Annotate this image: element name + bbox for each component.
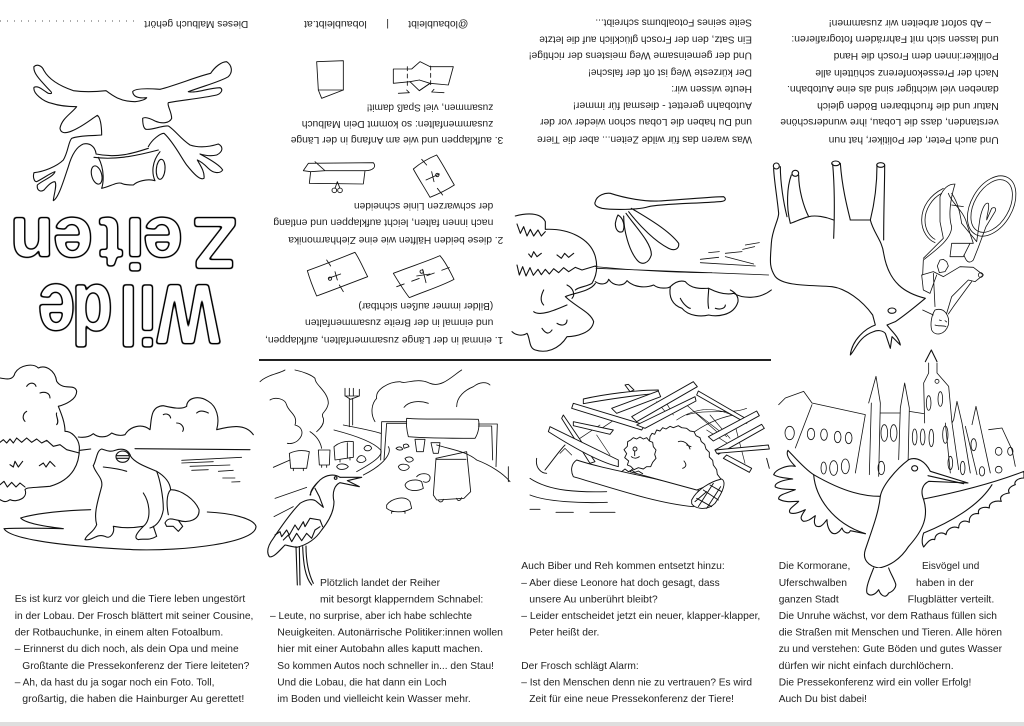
text block: town protest: haben in der: [916, 578, 974, 589]
panel: folding instructions (upside down): [265, 18, 503, 345]
text block: folding steps: zusammenfalten: so kommt Dein Malbuch: [301, 118, 493, 129]
text block: beaver, deer and frog dialogue: – Leider entscheidet jetzt ein neuer, klapper-klapper,: [521, 611, 760, 622]
text block: heron's warning: So kommen Autos noch schneller in... den Stau!: [277, 661, 494, 672]
text block: heron's warning: hier mit einer Autobahn alles kaputt machen.: [277, 644, 483, 655]
text block: heron's warning: Plötzlich landet der Reiher: [320, 578, 441, 589]
text block: closing moral: Autobahn gerettet - diesmal für immer!: [573, 99, 752, 110]
panel: dragonfly closing page (upside down): [512, 16, 771, 351]
footer: social handles: lobaubleibt.at: [304, 18, 367, 29]
text block: press conference result: verstanden, dass die Lobau, ihre wunderschöne: [780, 116, 999, 127]
illustration: deer: [770, 161, 937, 362]
text block: beaver, deer and frog dialogue: Peter heißt der.: [529, 628, 599, 638]
text block: opening dialogue: großartig, die haben die Hainburger Au gerettet!: [22, 694, 244, 705]
text block: press conference result: und lassen sich mit Fahrrädern fotografieren:: [791, 33, 999, 44]
illustration: frog on lily pad: [0, 365, 256, 550]
panel: deer and cyclist politician (upside down): [770, 17, 1024, 362]
illustration: motorway traffic jam: [260, 370, 510, 513]
text block: opening dialogue: [15, 594, 253, 705]
footer: social handles: @lobaubleibt: [408, 18, 468, 29]
text block: press conference result: Und auch Peter, der Politiker, hat nun: [828, 134, 999, 145]
text block: town protest: [779, 561, 1003, 705]
text block: press conference result: – Ab sofort arbeiten wir zusammen!: [829, 17, 991, 28]
text block: folding steps: 3. aufklappen und wie am Anfang in der Länge: [290, 134, 503, 145]
text block: opening dialogue: – Ah, da hast du ja sogar noch ein Foto. Toll,: [15, 678, 214, 688]
text block: press conference result: Nach der Pressekonferenz schütteln alle: [815, 67, 999, 78]
text block: opening dialogue: in der Lobau. Der Frosch blättert mit seiner Cousine,: [15, 611, 253, 622]
illustration: frog on a log: [33, 62, 231, 201]
icons: folding diagrams: [303, 61, 454, 298]
text block: beaver, deer and frog dialogue: Zeit für eine neue Pressekonferenz der Tiere!: [529, 694, 734, 705]
text block: town protest: die Straßen mit Menschen und Tieren. Alle hören: [779, 628, 1002, 638]
text block: press conference result: Politiker:innen dem Frosch die Hand: [833, 50, 999, 61]
text block: opening dialogue: – Erinnerst du dich noch, als dein Opa und meine: [15, 644, 239, 655]
text block: press conference result: Natur und die fruchtbaren Böden gleich: [817, 100, 999, 111]
panel: cover with title and frog on log (upside down): [10, 62, 237, 360]
text block: closing moral: Ein Satz, den der Frosch glücklich auf die letzte: [539, 33, 752, 44]
text block: beaver, deer and frog dialogue: Auch Biber und Reh kommen entsetzt hinzu:: [521, 561, 725, 572]
text block: town protest: Die Pressekonferenz wird ein voller Erfolg!: [779, 678, 971, 688]
text block: folding steps: (Bilder immer außen sichtbar): [358, 300, 493, 311]
text block: opening dialogue: Es ist kurz vor gleich und die Tiere leben ungestört: [15, 594, 245, 605]
text block: town protest: Die Unruhe wächst, vor dem Rathaus füllen sich: [779, 611, 997, 622]
text block: town protest: zu und verstehen: Gute Böden und gutes Wasser: [779, 644, 1003, 655]
text block: town protest: Die Kormorane,: [779, 561, 850, 572]
text block: closing moral: Seite seines Fotoalbums schreibt...: [595, 16, 752, 27]
text block: heron's warning: Neuigkeiten. Autonärrische Politiker:innen wollen: [277, 628, 503, 638]
panel: heron warns about motorway: [260, 370, 510, 705]
panel: frog and fire-bellied toad in the Lobau: [0, 365, 256, 705]
illustration: politician on bicycle: [922, 167, 1024, 334]
illustration: kingfisher in flight: [774, 450, 1024, 596]
illustration: town hall: [779, 363, 1015, 476]
text block: closing moral: Heute wissen wir:: [671, 83, 752, 94]
text block: town protest: dürfen wir nicht einfach durchlöchern.: [779, 661, 954, 672]
text block: press conference result: [780, 17, 999, 145]
footer: social handles: |: [386, 18, 389, 29]
text block: folding steps: und einmal in der Breite zusammenfalten: [305, 316, 493, 327]
text block: folding steps: 2. diese beiden Hälften wie eine Ziehharmonika: [288, 234, 503, 245]
text block: heron's warning: [270, 578, 503, 705]
text block: heron's warning: Und die Lobau, die hat dann ein Loch: [277, 678, 447, 688]
text block: closing moral: [529, 16, 752, 144]
text block: heron's warning: mit besorgt klapperndem Schnabel:: [320, 594, 483, 606]
text block: town protest: Flugblätter verteilt.: [908, 594, 994, 606]
text block: folding steps: nach innen falten, leicht aufklappen und entlang: [273, 217, 493, 228]
text block: town protest: Uferschwalben: [779, 578, 847, 589]
text block: beaver, deer and frog dialogue: – Aber diese Leonore hat doch gesagt, dass: [521, 578, 720, 589]
title: Wilde Zeiten: Zeiten: [10, 202, 237, 282]
text block: folding steps: [265, 101, 503, 345]
footer: social handles: [304, 18, 468, 29]
text block: closing moral: Was waren das für wilde Zeiten... aber die Tiere: [537, 133, 752, 144]
text block: town protest: ganzen Stadt: [779, 594, 839, 606]
illustration: heron: [268, 475, 362, 585]
illustration: dragonfly over pond: [512, 193, 771, 351]
text block: beaver, deer and frog dialogue: – Ist den Menschen denn nie zu vertrauen? Es wird: [521, 678, 752, 688]
text block: beaver, deer and frog dialogue: [521, 561, 760, 705]
illustration: beaver at its lodge: [530, 382, 769, 512]
text block: heron's warning: – Leute, no surprise, aber ich habe schlechte: [270, 611, 472, 622]
panel: beaver and deer alarmed: [521, 382, 769, 705]
text block: closing moral: Der kürzeste Weg ist oft der falsche!: [588, 66, 752, 77]
text block: town protest: Auch Du bist dabei!: [779, 694, 867, 705]
title: Wilde Zeiten: Wilde: [38, 266, 220, 360]
text block: beaver, deer and frog dialogue: Der Frosch schlägt Alarm:: [521, 661, 639, 672]
panel: kingfisher over the town hall: [774, 363, 1024, 705]
text block: press conference result: daneben viel wichtiger sind als eine Autobahn.: [787, 83, 999, 94]
text block: beaver, deer and frog dialogue: unsere Au unberührt bleibt?: [529, 594, 658, 606]
text block: folding steps: zusammen, viel Spaß damit!: [367, 101, 493, 112]
title: Wilde Zeiten: [10, 202, 237, 360]
text block: folding steps: 1. einmal in der Länge zusammenfalten, aufklappen,: [265, 334, 503, 345]
footer: ownership line with dotted rule: Dieses Malbuch gehört: [144, 18, 248, 29]
text block: closing moral: Und der gemeinsame Weg meistens der richtige!: [529, 50, 752, 61]
text block: heron's warning: im Boden und vielleicht kein Wasser mehr.: [277, 694, 471, 705]
text block: opening dialogue: der Rotbauchunke, in einem alten Fotoalbum.: [15, 628, 223, 638]
text block: closing moral: und Du haben die Lobau schon wieder vor der: [539, 116, 752, 127]
text block: folding steps: der schwarzen Linie schneiden: [354, 200, 493, 211]
text block: opening dialogue: Großtante die Pressekonferenz der Tiere leiteten?: [22, 661, 250, 672]
text block: town protest: Eisvögel und: [922, 561, 980, 572]
